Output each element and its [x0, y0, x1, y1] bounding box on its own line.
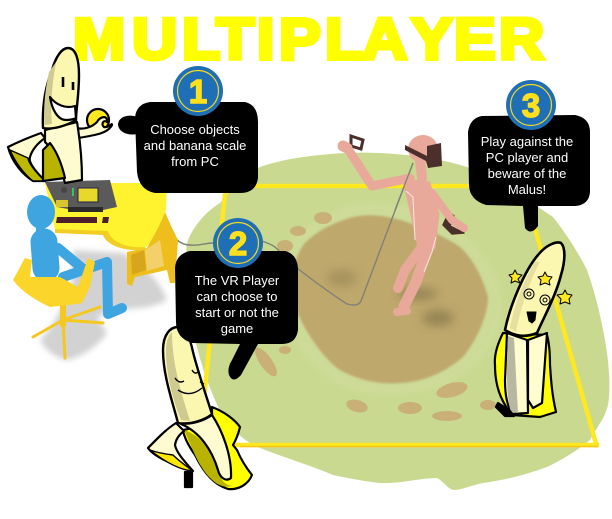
badge 2: 2: [229, 225, 247, 262]
desk: [45, 180, 178, 286]
chair seat: [13, 258, 95, 307]
cable over player: [395, 163, 413, 210]
chair and blue PC player: [13, 195, 122, 358]
text 3: [481, 134, 573, 197]
text 2: can choose to: [197, 289, 277, 304]
desk shadow: [40, 250, 167, 360]
dizzy spirals: [524, 289, 550, 305]
VR player: [343, 135, 464, 312]
badge 3: [506, 80, 556, 130]
text 1: from PC: [171, 154, 219, 169]
body highlights: [406, 191, 436, 272]
text 1: and banana scale: [144, 138, 246, 153]
dizzy stars: [509, 270, 572, 304]
text 2: [195, 273, 280, 336]
blue figure: [27, 195, 122, 314]
text 3: Play against the: [481, 134, 573, 149]
player shadows: [327, 270, 357, 286]
text 3: PC player and: [486, 150, 568, 165]
callout 3: [468, 80, 590, 232]
controller rear: [351, 136, 363, 149]
badge 2: [213, 218, 263, 268]
body: [343, 135, 464, 312]
text 2: game: [221, 321, 253, 336]
banana 2 sleeping: [148, 327, 252, 489]
cable: [170, 163, 413, 305]
title: MULTIPLAYER: [73, 6, 544, 71]
text 3: beware of the: [488, 166, 566, 181]
chair base: [33, 305, 103, 358]
sand patch: [292, 215, 488, 383]
text 1: Choose objects: [150, 122, 240, 137]
text 2: The VR Player: [195, 273, 280, 288]
text 2: start or not the: [195, 305, 279, 320]
sand spots: [251, 212, 496, 421]
badge 3: 3: [522, 87, 540, 124]
yellow play boundary: [199, 184, 599, 447]
badge 1: 1: [189, 73, 207, 110]
callout 2: [175, 218, 298, 380]
banana 3 dizzy: [495, 242, 572, 417]
VR headset: [405, 143, 442, 168]
computer monitor: [45, 180, 117, 212]
callout 1: [118, 66, 258, 193]
text 3: Malus!: [508, 182, 546, 197]
banana 1 smiling: [8, 48, 112, 183]
text 1: [144, 122, 246, 169]
panel: play area ground: [186, 153, 609, 490]
